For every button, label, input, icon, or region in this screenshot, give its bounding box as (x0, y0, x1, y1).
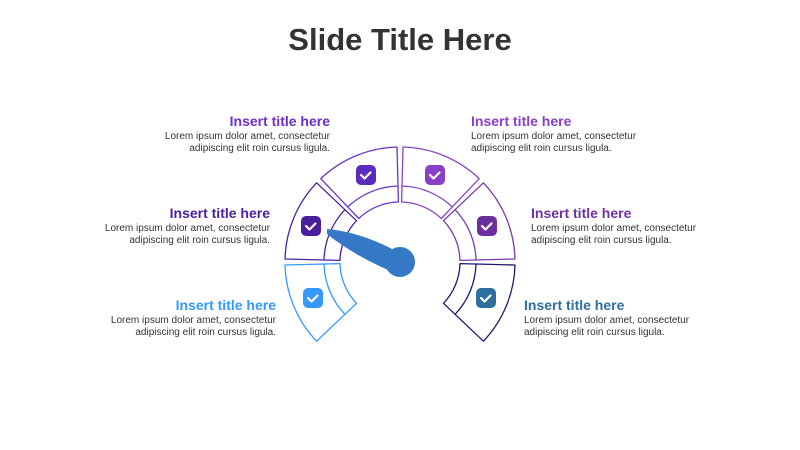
segment: upper right (402, 147, 479, 218)
text: middle right: adipiscing elit roin cursus ligula. (531, 235, 672, 246)
text: middle left: Insert title here (170, 205, 270, 221)
text: bottom right (524, 297, 689, 338)
text: middle left: Lorem ipsum dolor amet, consectetur (105, 223, 270, 234)
text: top right: Insert title here (471, 113, 571, 129)
text: top left: adipiscing elit roin cursus ligula. (189, 143, 330, 154)
text: top left: Lorem ipsum dolor amet, consectetur (165, 131, 330, 142)
text: bottom right: Lorem ipsum dolor amet, consectetur (524, 315, 689, 326)
segment: right (444, 183, 515, 260)
text: bottom right: Insert title here (524, 297, 624, 313)
text: middle left: adipiscing elit roin cursus ligula. (129, 235, 270, 246)
text: top left (165, 113, 330, 154)
segment: left (285, 183, 356, 260)
text: middle right: Insert title here (531, 205, 631, 221)
text: middle left (105, 205, 270, 246)
text: bottom left (111, 297, 276, 338)
text: middle right (531, 205, 696, 246)
needle (327, 229, 415, 277)
icons: checkboxes (301, 165, 497, 308)
text: middle right: Lorem ipsum dolor amet, consectetur (531, 223, 696, 234)
text: bottom left: adipiscing elit roin cursus ligula. (135, 327, 276, 338)
segment: lower right (444, 264, 515, 341)
text: top right: adipiscing elit roin cursus ligula. (471, 143, 612, 154)
text: bottom right: adipiscing elit roin cursus ligula. (524, 327, 665, 338)
segment: lower left (285, 264, 356, 341)
title: Slide Title Here (288, 22, 512, 57)
text: top right: Lorem ipsum dolor amet, consectetur (471, 131, 636, 142)
text: bottom left: Lorem ipsum dolor amet, consectetur (111, 315, 276, 326)
text: top left: Insert title here (230, 113, 330, 129)
text: top right (471, 113, 636, 154)
text: bottom left: Insert title here (176, 297, 276, 313)
segment: upper left (321, 147, 398, 218)
